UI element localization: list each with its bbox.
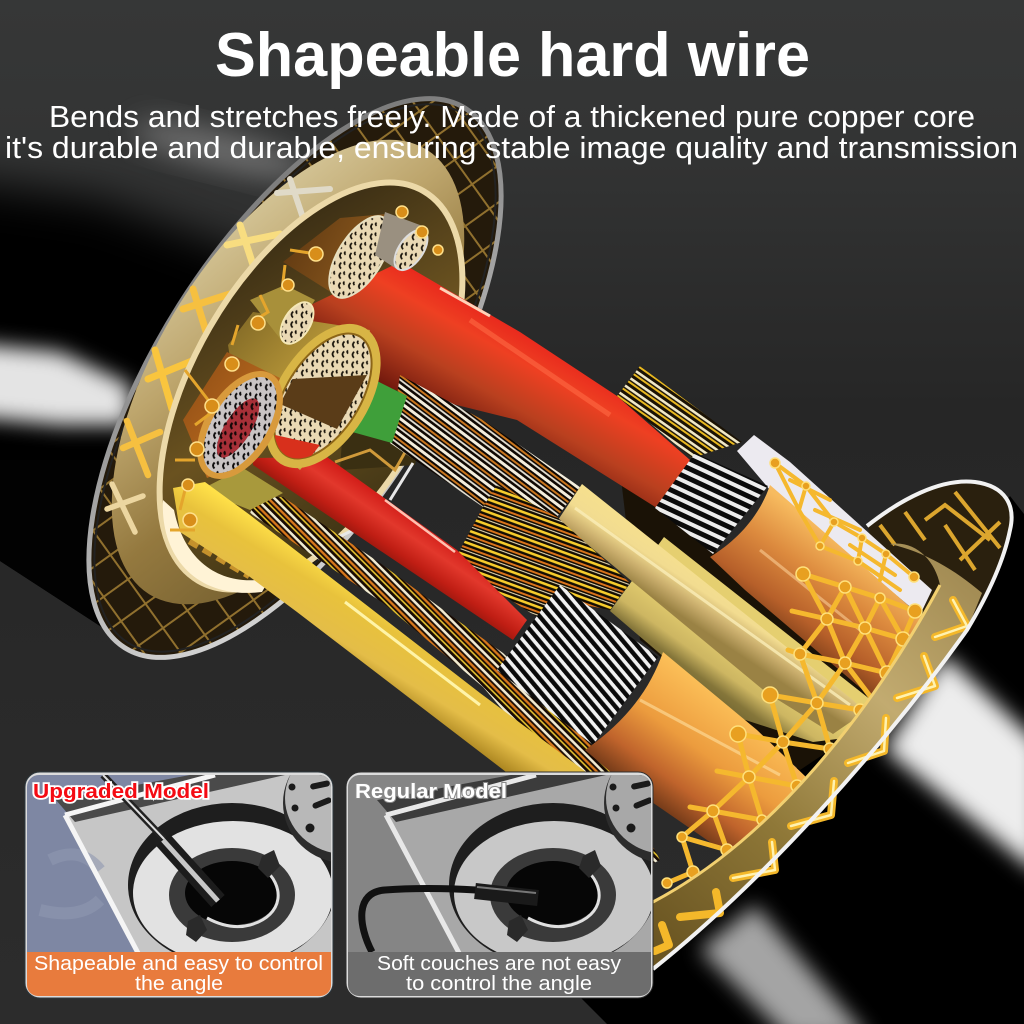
soft cable (362, 887, 538, 952)
rigid probe (103, 775, 218, 901)
panel: regular model (346, 772, 654, 998)
right gold ring band (653, 482, 1012, 969)
yellow tube, lower (173, 468, 590, 775)
black cable, right section (570, 480, 1024, 1024)
X marks on the ring (107, 179, 330, 532)
photo: drain with rigid probe (27, 775, 331, 952)
olive tube (610, 537, 890, 742)
caption: grey (348, 952, 651, 996)
striped wire beside green tube (390, 375, 580, 517)
gold stranded core, middle (453, 485, 630, 617)
big red tube (300, 262, 690, 510)
right ring outer rim (653, 482, 1012, 969)
red tube, lower (253, 457, 527, 640)
upper stranded wire (617, 366, 742, 458)
orange tube, lower (585, 652, 807, 858)
copper stranded wire, lower (250, 497, 660, 870)
left disk: rim and back lattice (9, 35, 581, 721)
chevron marks on the ring (655, 600, 967, 951)
gold lattice nodes in left opening (170, 206, 443, 530)
silver stranded core, lower (497, 585, 658, 745)
silver stranded core, upper (655, 453, 768, 554)
green tube (345, 379, 407, 443)
caption text: to control the angle (406, 973, 592, 995)
brown tube and stranded end (283, 206, 403, 308)
left gold ring band (41, 82, 535, 662)
pale yellow tube (558, 484, 865, 734)
black cable, left section (0, 108, 300, 627)
subtitle: it's durable and durable, ensuring stable image quality and transmission (5, 130, 1018, 165)
subtitle: Bends and stretches freely. Made of a thickened pure copper core (49, 99, 975, 134)
large gold tube and stranded end (228, 312, 381, 470)
label: regular model: Regular Model (355, 781, 507, 803)
right disk back with lattice (867, 482, 1012, 630)
panel: upgraded model (24, 772, 334, 998)
left ring opening (97, 133, 525, 639)
photo: drain with soft cable (348, 775, 651, 952)
gold lattice over right tubes (662, 458, 922, 888)
copper tube and stranded end (179, 352, 301, 494)
dark gap behind right tubes (620, 470, 880, 770)
caption text: Shapeable and easy to control (34, 953, 323, 975)
orange tube, upper (710, 485, 925, 702)
label: upgraded model: Upgraded Model (33, 781, 209, 803)
white inner tube (737, 435, 932, 615)
caption text: the angle (135, 973, 223, 995)
caption: orange (27, 952, 331, 996)
lattice seen through opening (333, 360, 440, 540)
title: Shapeable hard wire (215, 21, 810, 90)
small gold tube and end (250, 285, 320, 349)
small grey tube and stranded end (375, 212, 434, 276)
caption text: Soft couches are not easy (377, 953, 621, 975)
